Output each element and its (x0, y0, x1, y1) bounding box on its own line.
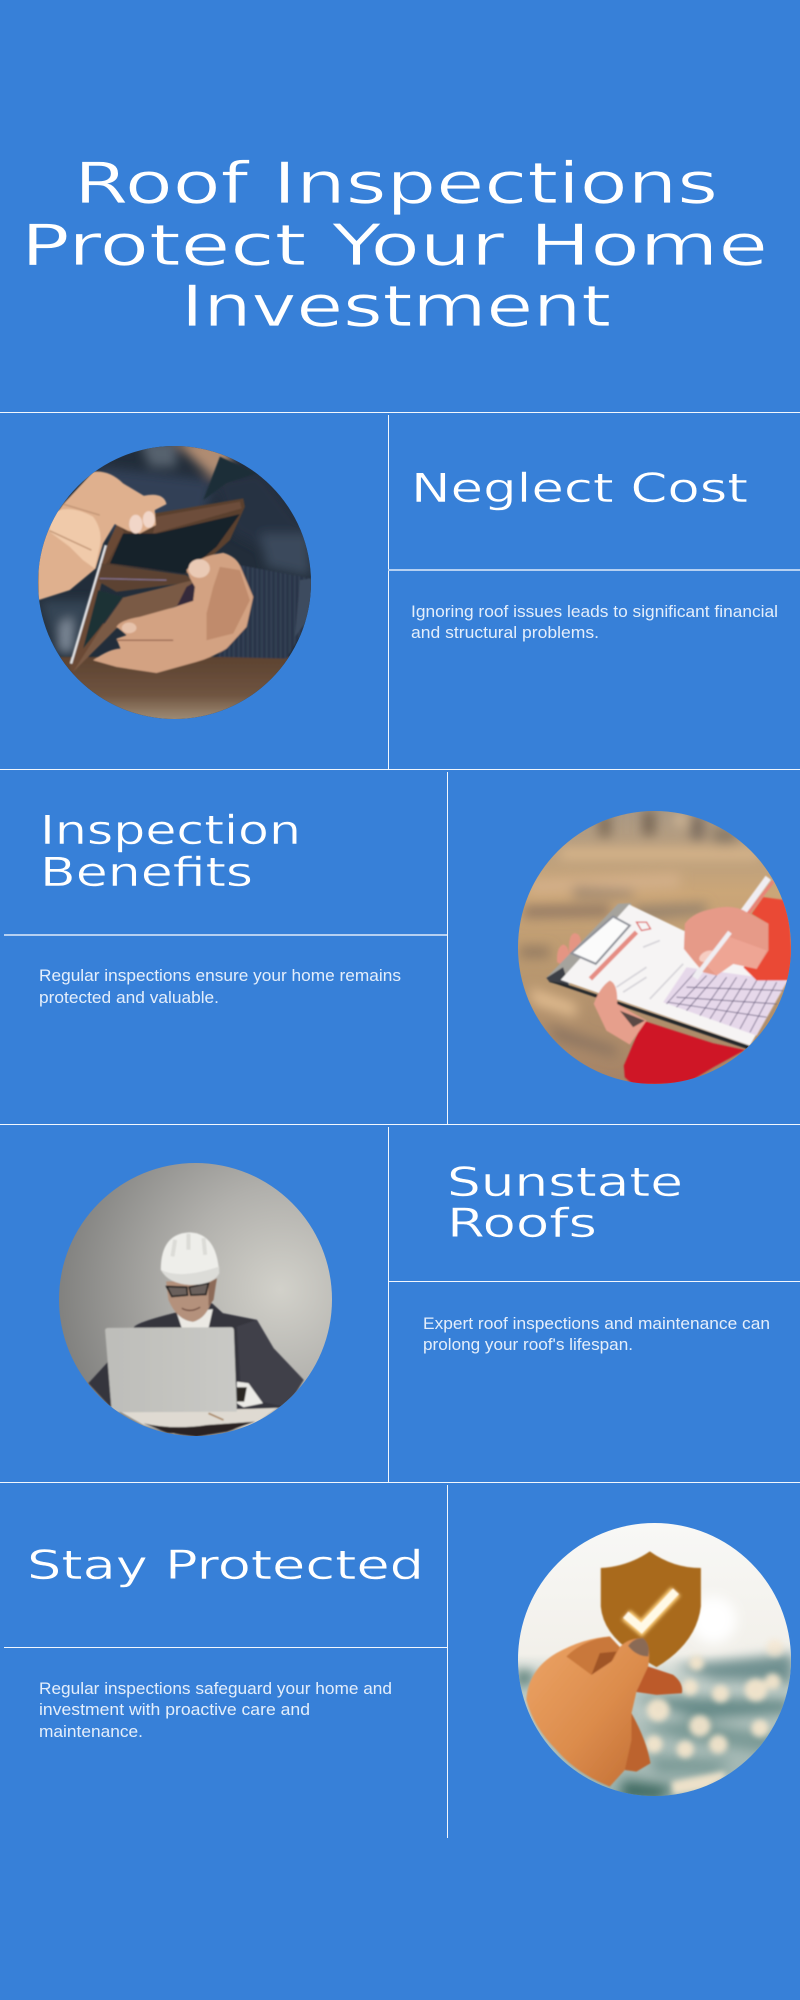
clip (571, 916, 630, 964)
laptop (105, 1327, 237, 1412)
text: stay protected description (39, 1680, 392, 1741)
wallet top flap (106, 498, 245, 573)
check mark (626, 1591, 676, 1628)
suit (88, 1303, 304, 1409)
heading: Inspection Benefits: Inspection (40, 808, 301, 854)
cuff and watch (237, 1382, 263, 1407)
text: sunstate roofs description: prolong your roof's lifespan. (423, 1336, 633, 1354)
right hand (93, 553, 253, 673)
right sleeve (743, 897, 793, 981)
panel: sunstate roofs (59, 1127, 800, 1482)
heading: Neglect Cost: Neglect Cost (411, 466, 748, 512)
panel: neglect cost (38, 415, 800, 769)
text: sunstate roofs description: Expert roof inspections and maintenance can (423, 1315, 770, 1333)
pen (695, 878, 768, 978)
title (21, 151, 768, 340)
text: inspection benefits description (39, 967, 401, 1007)
photo: hand holding shield with check mark (518, 1523, 791, 1796)
text: neglect cost description: and structural problems. (411, 624, 599, 642)
left hand (38, 472, 166, 600)
text: sunstate roofs description (423, 1315, 770, 1354)
text: inspection benefits description: protected and valuable. (39, 989, 219, 1007)
text: stay protected description: investment with proactive care and (39, 1701, 310, 1719)
right sleeve (217, 565, 312, 659)
photo: person filling in inspection checklist (518, 811, 791, 1084)
photo: hands opening empty wallet (38, 446, 311, 719)
shirt (177, 1309, 213, 1328)
text: neglect cost description (411, 603, 778, 642)
heading: Stay Protected: Stay Protected (27, 1543, 424, 1589)
clipboard (546, 903, 633, 987)
paper (561, 904, 787, 1046)
heading: Inspection Benefits (40, 808, 301, 896)
glasses (167, 1286, 187, 1296)
shield (601, 1551, 701, 1667)
hard hat (161, 1232, 219, 1285)
heading: Inspection Benefits: Benefits (40, 850, 253, 896)
text: inspection benefits description: Regular inspections ensure your home remains (39, 967, 401, 985)
title: Roof Inspections (74, 151, 718, 217)
heading: Sunstate Roofs: Sunstate (447, 1160, 683, 1206)
lower red sleeve (624, 1021, 745, 1085)
wallet spine and lower pockets (70, 522, 124, 672)
panel: stay protected (4, 1485, 791, 1838)
hand (526, 1636, 649, 1787)
heading: Sunstate Roofs: Roofs (447, 1201, 597, 1247)
title: Protect Your Home (21, 213, 768, 279)
right hand (684, 907, 768, 976)
left hand fingers (557, 933, 581, 967)
table (120, 1408, 277, 1435)
title: Investment (181, 274, 611, 340)
text: neglect cost description: Ignoring roof issues leads to significant financial (411, 603, 778, 621)
photo: engineer in hard hat at laptop (59, 1163, 332, 1436)
index finger (633, 1667, 682, 1695)
text: stay protected description: Regular inspections safeguard your home and (39, 1680, 392, 1698)
left thumb (594, 981, 646, 1045)
panel: inspection benefits (4, 772, 791, 1124)
heading: Sunstate Roofs (447, 1160, 683, 1247)
text: stay protected description: maintenance. (39, 1723, 143, 1741)
table (38, 657, 311, 720)
face (166, 1280, 217, 1322)
